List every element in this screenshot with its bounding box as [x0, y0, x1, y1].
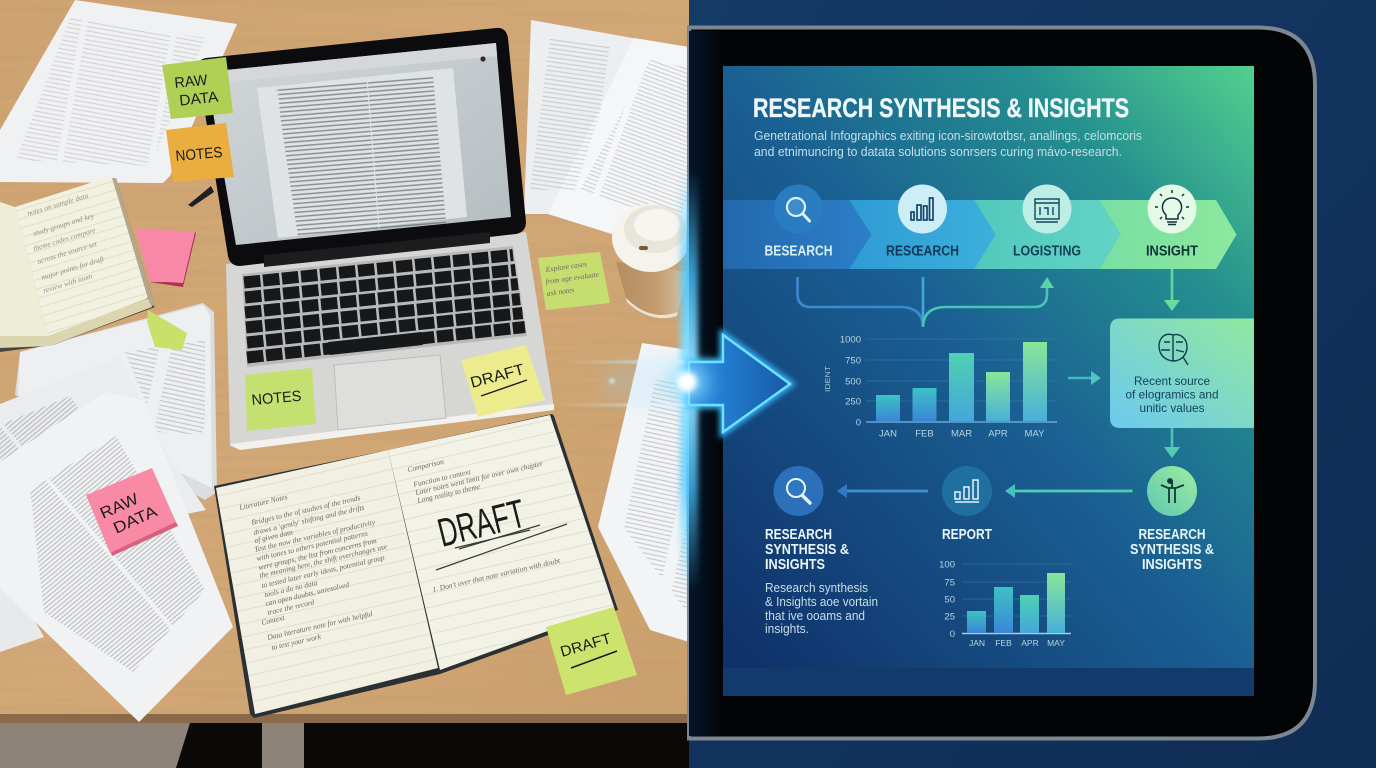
handwritten notes right page: Long reality to theme: [415, 482, 482, 505]
handwritten notes left page: Data literature note for with helpful: [265, 609, 374, 642]
coffee cup: [612, 204, 690, 318]
bar chart: report: 75: [944, 578, 955, 588]
bar chart: report: [939, 560, 1071, 648]
handwritten notes left page: the meaning here, the shift overchanges use: [258, 542, 389, 580]
heading: research synthesis right: SYNTHESIS &: [1130, 541, 1214, 558]
sticky note: raw data pink: RAW: [98, 490, 142, 523]
body text: & Insights aoe vortain: [765, 595, 878, 609]
step: insight: [1146, 184, 1198, 260]
bar chart: report: FEB: [995, 638, 1012, 648]
bar chart: monthly values: 0: [856, 418, 861, 428]
sticky note: raw data green: DATA: [179, 89, 219, 110]
sticky note: draft green bottom: DRAFT: [558, 630, 613, 661]
handwritten notes left page: [237, 492, 389, 652]
subtitle: Genetrational Infographics exiting icon-sirowtotbsr, anallings, celomcoris: [754, 128, 1142, 143]
callout card: Recent source: [1134, 374, 1210, 388]
icon: brain: [1159, 334, 1188, 365]
paper: lower right sheet: [598, 343, 689, 642]
callout card: [1110, 318, 1254, 428]
body text: Research synthesis: [765, 581, 868, 595]
notebook: left side open: across the source set: [36, 239, 99, 266]
step: report circle: [942, 466, 992, 516]
step: logisting: LOGISTING: [1013, 244, 1081, 260]
sticky note: raw data green: RAW: [174, 72, 209, 92]
step: research bars: RESŒARCH: [886, 244, 959, 260]
process chevrons: [723, 200, 1236, 269]
heading: research synthesis right: [1130, 526, 1214, 573]
body text: that ive ooams and: [765, 609, 865, 623]
panel: tablet screen: [723, 66, 1254, 696]
heading: research synthesis right: INSIGHTS: [1142, 556, 1202, 573]
body text: insights.: [765, 622, 809, 636]
bar chart: report: 0: [950, 629, 955, 640]
sticky note: green folded flag: [147, 310, 187, 350]
handwritten notes left page: to tested later early ideas, potential group: [260, 553, 386, 590]
handwritten notes left page: can open doubts, unresolved: [264, 580, 350, 608]
bar chart: monthly values: 250: [845, 396, 861, 408]
callout card: unitic values: [1140, 401, 1204, 415]
bar chart: monthly values: MAR: [951, 428, 972, 440]
callout card: of elogramics and: [1126, 388, 1218, 402]
sticky note: small green with handwriting: from age evaluate: [545, 269, 600, 286]
body text: [765, 581, 878, 636]
paper: middle sheet: [0, 396, 206, 514]
step: logisting: [1013, 184, 1081, 260]
laptop: [198, 28, 554, 450]
bar chart: monthly values: FEB: [915, 428, 934, 440]
bracket connector: [798, 277, 1054, 327]
arrow: to report: [1005, 484, 1132, 498]
bar chart: monthly values: IDENT: [823, 366, 832, 392]
heading: research synthesis left: [765, 526, 849, 573]
bar chart: report: MAY: [1047, 638, 1065, 648]
bar chart: monthly values: [823, 334, 1057, 440]
bar chart: report: JAN: [969, 638, 985, 648]
handwritten notes left page: with tones to others potential patterns: [255, 529, 369, 563]
laptop hinge: [264, 232, 490, 267]
sticky note: raw data green: [162, 57, 233, 119]
handwritten notes left page: of given data: [253, 527, 294, 545]
notebook: left side open: study groups and key: [32, 211, 96, 238]
sticky note: notes orange: [166, 123, 234, 182]
paper: right top sheets: [524, 20, 689, 240]
panel: desk with research papers: [0, 0, 690, 768]
arrow: card down: [1164, 428, 1180, 458]
handwritten notes left page: to test your work: [270, 632, 322, 652]
handwritten notes left page: Context: [260, 613, 286, 627]
notebook: left side open: major points for draft: [40, 254, 106, 282]
handwritten notes left page: Test the now the variables of productivity: [253, 517, 377, 554]
sticky note: draft yellow on laptop: [461, 345, 545, 417]
paper: top left: [0, 0, 237, 183]
step: insight: INSIGHT: [1146, 244, 1198, 260]
step: research bars: [886, 184, 959, 260]
handwritten notes left page: were groups, the list from concerns from: [257, 536, 378, 572]
handwritten notes left page: tools a do no data: [263, 578, 318, 599]
handwritten notes right page: Later notes went limit for over own chapter: [413, 459, 544, 497]
subtitle: [754, 128, 1142, 159]
pen: [188, 186, 214, 207]
bar chart: monthly values: JAN: [879, 428, 897, 440]
heading: research synthesis right: RESEARCH: [1138, 526, 1206, 543]
step: research: [764, 184, 832, 260]
step: research: BESEARCH: [764, 244, 832, 260]
bar chart: monthly values: MAY: [1025, 428, 1045, 440]
bar chart: monthly values: 750: [845, 356, 861, 366]
panel: navy background and tablet: [689, 0, 1376, 768]
bar chart: report: 25: [944, 612, 955, 622]
wooden desk surface: [0, 0, 689, 723]
laptop base: [226, 232, 554, 450]
notebook: left side open: review with team: [42, 271, 94, 295]
heading: research synthesis left: SYNTHESIS &: [765, 541, 849, 558]
bar chart: report: 100: [939, 560, 955, 570]
subtitle: and etnimuncing to datata solutions sonrsers curing mávo-research.: [754, 144, 1122, 159]
handwritten notes left page: trace the record: [266, 597, 315, 617]
notebook: open with draft notes: [214, 414, 618, 718]
left page: [216, 450, 438, 714]
step: bottom right circle: [1147, 466, 1197, 516]
notebook: left side open: theme codes compare: [32, 225, 97, 253]
keyboard: [242, 246, 527, 367]
arrow: chart to card: [1068, 371, 1101, 385]
title: RESEARCH SYNTHESIS & INSIGHTS: [753, 93, 1129, 123]
floor below desk: [0, 723, 689, 768]
bar chart: monthly values: APR: [988, 428, 1008, 440]
notebook: left side open: [0, 176, 155, 352]
bar chart: monthly values: 500: [845, 376, 861, 388]
sticky note: notes green on laptop: [245, 368, 316, 431]
arrow: insight to card: [1164, 269, 1180, 311]
sticky note: draft yellow on laptop: DRAFT: [469, 361, 527, 392]
sticky note: small green with handwriting: ask notes: [546, 285, 575, 298]
trackpad: [334, 355, 446, 430]
tablet frame: [689, 28, 1315, 738]
handwritten notes left page: Bridges to the of studies of the trends: [250, 493, 361, 527]
heading: research synthesis left: RESEARCH: [765, 526, 832, 543]
handwritten notes left page: Literature Notes: [237, 492, 288, 512]
handwritten notes right page: [406, 457, 567, 594]
bar chart: report: 50: [944, 594, 955, 606]
bar chart: monthly values: 1000: [840, 334, 861, 346]
laptop screen: [206, 43, 511, 245]
paper: lower left corner sheet: [0, 588, 44, 652]
handwritten notes left page: draws a 'gently' shifting and the drifts: [252, 503, 365, 537]
arrow: to research: [837, 484, 928, 498]
sticky note: raw data pink: [86, 468, 178, 556]
handwritten notes right page: DRAFT: [434, 492, 530, 556]
handwritten notes right page: 1. Don't over that note variation with doubt: [431, 556, 562, 594]
step: bottom left circle: [774, 466, 824, 516]
heading: report: REPORT: [942, 526, 992, 543]
heading: research synthesis left: INSIGHTS: [765, 556, 825, 573]
notebook: left side open: notes on sample data: [26, 191, 90, 218]
sticky note: small green with handwriting: Explore cases: [544, 259, 588, 274]
paper: large angled sheet: [0, 392, 233, 722]
sticky note: notes orange: NOTES: [175, 144, 223, 165]
laptop lid: [198, 28, 526, 266]
sticky note: raw data pink: DATA: [111, 503, 160, 538]
glowing transition arrow: [560, 170, 790, 590]
handwritten notes right page: Comparison: [406, 457, 445, 474]
bar chart: report: APR: [1021, 638, 1039, 648]
sticky note: notes green on laptop: NOTES: [251, 388, 302, 409]
sticky note: small green with handwriting: [538, 252, 610, 310]
paper: stack behind notebook: [15, 303, 217, 500]
handwritten notes right page: Function to context: [411, 467, 472, 489]
sticky note: draft green bottom: [546, 607, 637, 695]
sticky note: pink pad: [135, 228, 196, 287]
right page: [388, 415, 614, 670]
